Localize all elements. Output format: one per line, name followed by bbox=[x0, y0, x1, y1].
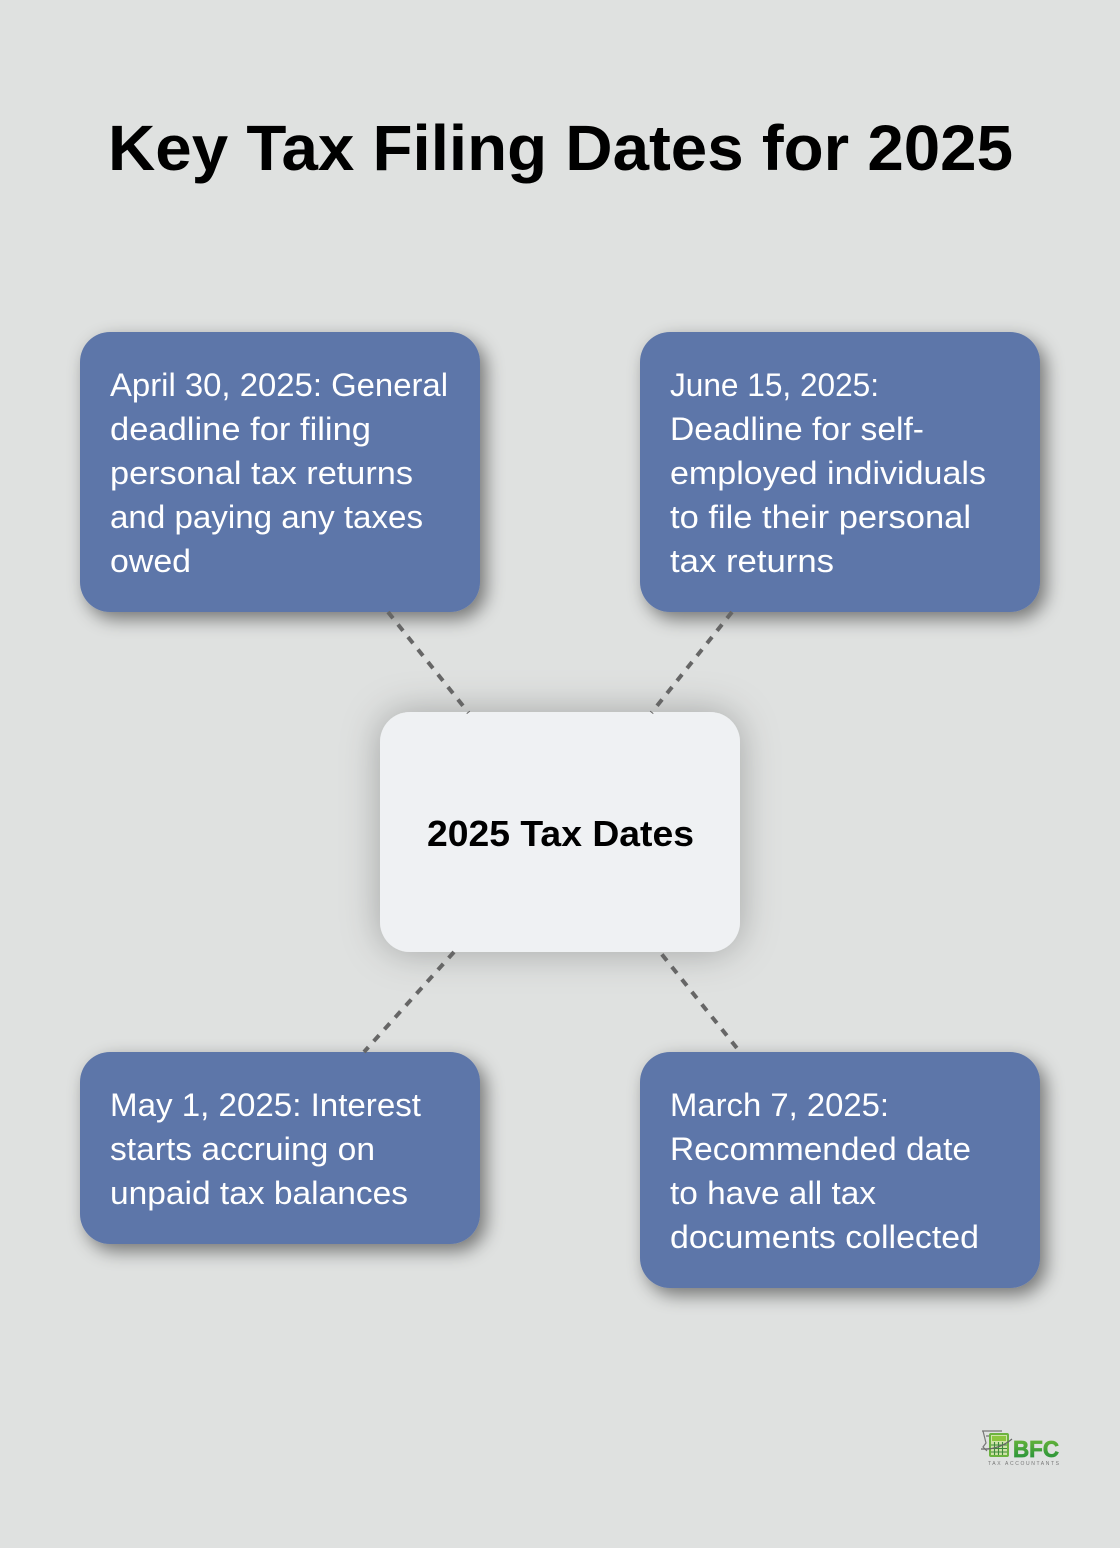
panel text: Recommended date bbox=[670, 1131, 971, 1167]
panel box bbox=[80, 1052, 480, 1244]
icon: calculator bbox=[981, 1431, 1012, 1456]
panel: April 30 deadline bbox=[80, 332, 480, 612]
panel text bbox=[670, 1087, 979, 1255]
central label: 2025 Tax Dates bbox=[427, 813, 694, 854]
panel: March 7 documents bbox=[640, 1052, 1040, 1288]
central box bbox=[380, 712, 740, 952]
panel text: personal tax returns bbox=[110, 455, 413, 491]
logo: BFC Tax Accountants bbox=[981, 1431, 1060, 1467]
panel text: and paying any taxes bbox=[110, 499, 423, 535]
panel text: unpaid tax balances bbox=[110, 1175, 408, 1211]
panel text: deadline for filing bbox=[110, 411, 371, 447]
panel text bbox=[670, 367, 986, 579]
connector: centre to May panel bbox=[364, 952, 454, 1052]
panel text: June 15, 2025: bbox=[670, 367, 879, 403]
panel text: April 30, 2025: General bbox=[110, 367, 448, 403]
panel text: starts accruing on bbox=[110, 1131, 375, 1167]
central node bbox=[380, 712, 740, 952]
panel box bbox=[640, 1052, 1040, 1288]
connector: centre to March panel bbox=[660, 952, 740, 1052]
panel text: to file their personal bbox=[670, 499, 971, 535]
panel text: to have all tax bbox=[670, 1175, 876, 1211]
logo tagline: TAX ACCOUNTANTS bbox=[988, 1461, 1060, 1467]
panel box bbox=[80, 332, 480, 612]
panel text bbox=[110, 1087, 421, 1211]
panel text: March 7, 2025: bbox=[670, 1087, 889, 1123]
panel text: Deadline for self- bbox=[670, 411, 924, 447]
connector: June panel to centre bbox=[651, 612, 732, 713]
title: Key Tax Filing Dates for 2025 bbox=[108, 112, 1013, 184]
panel text: May 1, 2025: Interest bbox=[110, 1087, 421, 1123]
logo wordmark: BFC bbox=[1013, 1436, 1059, 1462]
panel text: employed individuals bbox=[670, 455, 986, 491]
panel text: owed bbox=[110, 543, 191, 579]
panel: June 15 deadline bbox=[640, 332, 1040, 612]
connector: April panel to centre bbox=[388, 612, 469, 713]
panel text: documents collected bbox=[670, 1219, 979, 1255]
panel: May 1 interest bbox=[80, 1052, 480, 1244]
panel box bbox=[640, 332, 1040, 612]
panel text: tax returns bbox=[670, 543, 834, 579]
panel text bbox=[110, 367, 448, 579]
